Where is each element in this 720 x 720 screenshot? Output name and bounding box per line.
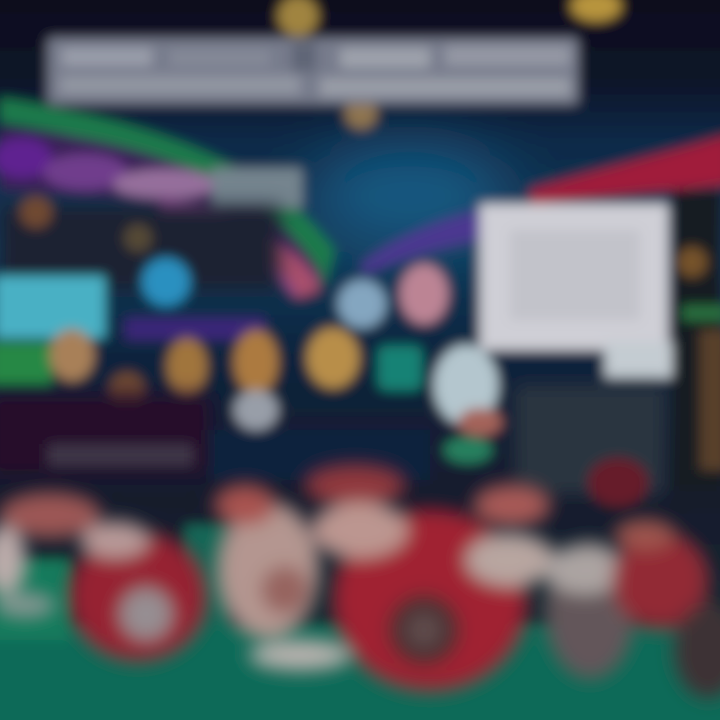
left panel body: [0, 196, 280, 306]
chip: left: [0, 493, 206, 660]
poker chips: [0, 465, 720, 698]
chip: right: [545, 520, 720, 698]
right side: [515, 190, 720, 506]
right white panel: [480, 204, 681, 378]
left game screen: [0, 276, 265, 384]
table felt: [0, 525, 720, 720]
right banner: [360, 135, 720, 275]
lower left dark panel: [0, 394, 430, 480]
top lights: [278, 0, 621, 129]
row of icons: [109, 264, 502, 463]
chip: centre left: [215, 465, 405, 669]
title: [48, 38, 578, 104]
chip: centre: [312, 485, 554, 690]
left banner: rainbow arc: [0, 98, 335, 300]
